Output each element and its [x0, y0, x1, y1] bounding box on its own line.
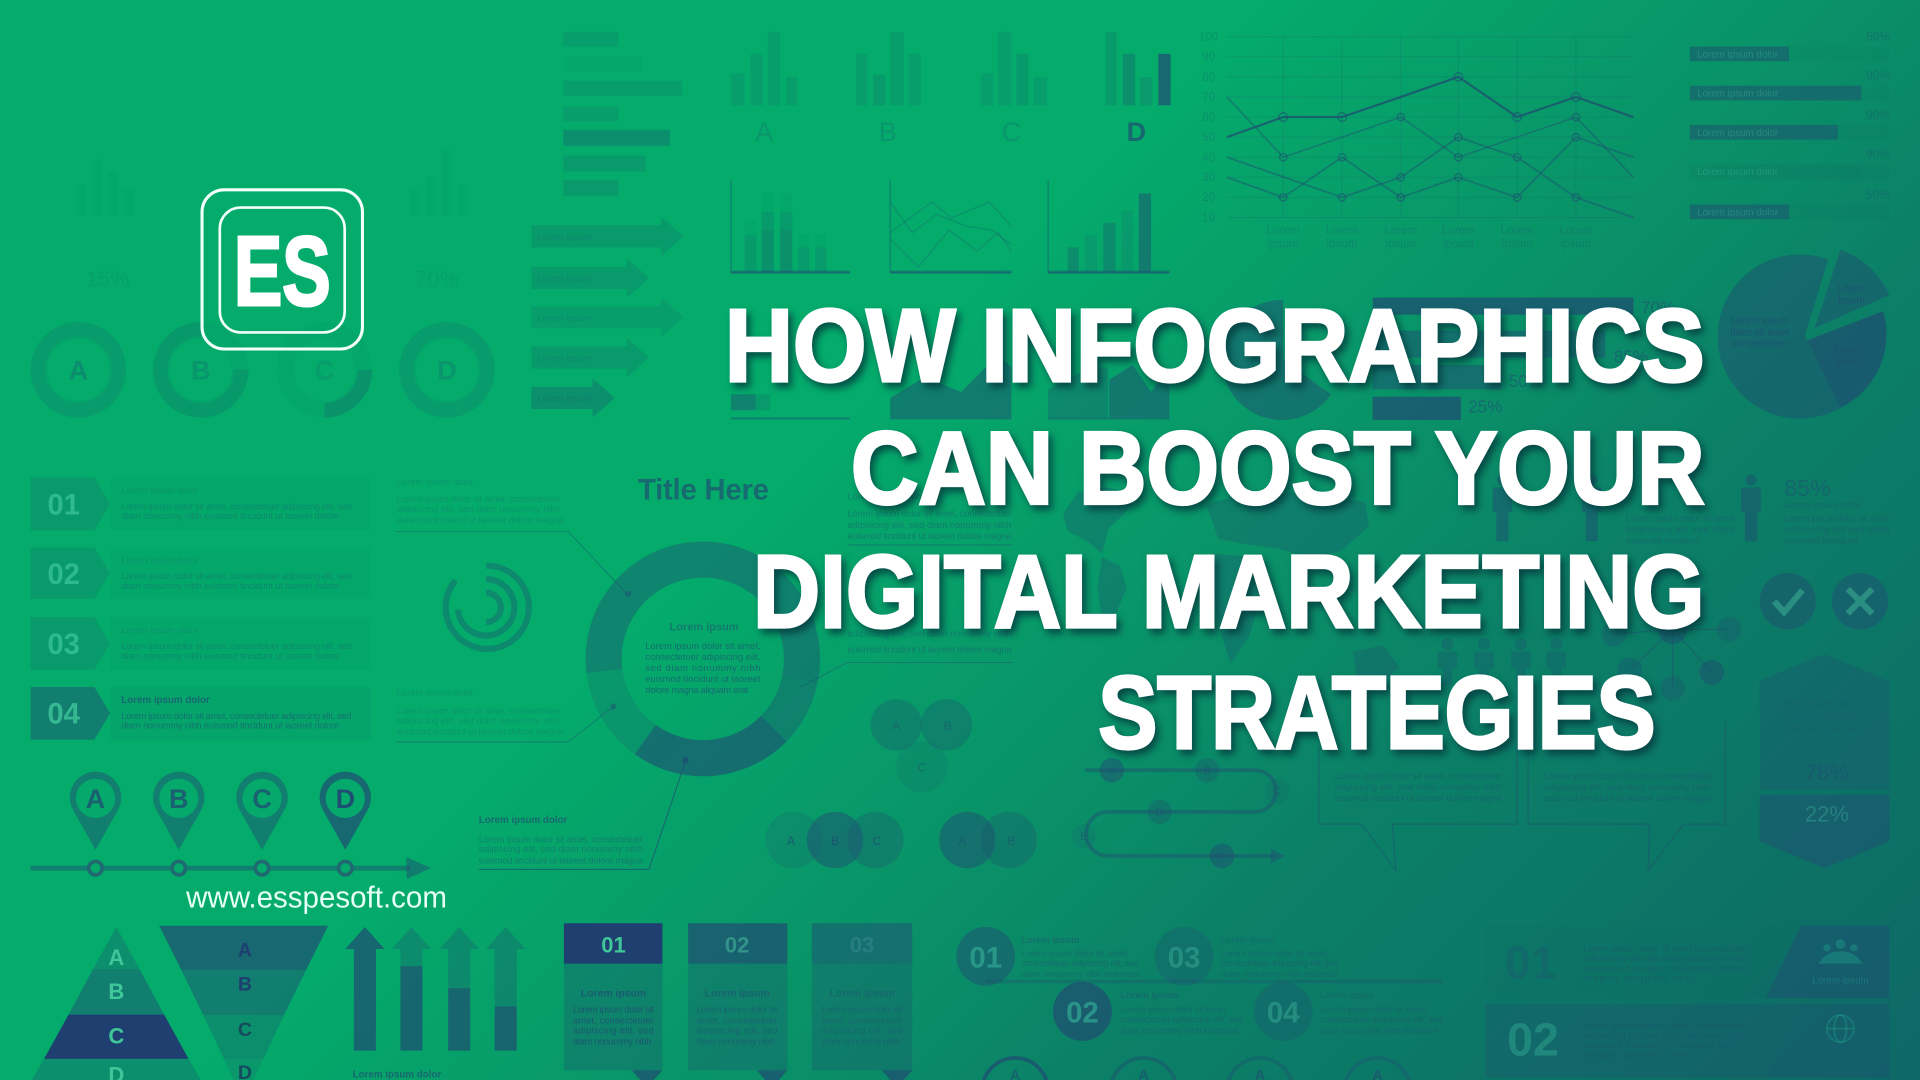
- large exploded pie chart: ipsum: [1838, 296, 1864, 307]
- panel 02 right: [1485, 1004, 1889, 1078]
- row 01: Lorem ipsum dolor sit amet, consectetuer adipiscing elit, sed: [121, 501, 351, 511]
- bar chart group B: [856, 32, 921, 147]
- card 03: [812, 923, 912, 1080]
- icon: globe: [1827, 1015, 1854, 1042]
- panel 01 right: 01: [1505, 936, 1556, 988]
- card 03: amet, consectetuer: [822, 1016, 902, 1026]
- pin A: A: [86, 784, 105, 814]
- card 02: diam nonummy nibh: [697, 1036, 775, 1046]
- x labels: [1267, 224, 1592, 250]
- bar chart group D: [1106, 32, 1171, 147]
- step 02: 02: [1066, 996, 1099, 1029]
- snake timeline: A: [1108, 765, 1116, 777]
- x labels: ipsum: [1327, 237, 1358, 250]
- donut centre text: sed diam nonummy nibh: [645, 663, 760, 673]
- progress bars: 90%: [1866, 148, 1889, 161]
- step 01: Lorem ipsum: [1021, 935, 1080, 945]
- speech bubble left: adipiscing elit, sed diam nonummy nibh: [1335, 782, 1501, 792]
- hexagon stat: 22%: [1805, 802, 1849, 827]
- panel 02 right: 02: [1507, 1014, 1559, 1066]
- speech bubble right: Lorem ipsum dolor sit amet, consectetuer: [1544, 771, 1711, 781]
- small line chart: [890, 180, 1011, 274]
- callouts right of donut: Lorem ipsum dolor: [847, 492, 924, 502]
- venn diagram AB: B: [1007, 834, 1016, 848]
- title line 3: DIGITAL MARKETING: [753, 534, 1704, 649]
- card 02: adipiscing elit, sed: [697, 1025, 778, 1035]
- card 03: Lorem ipsum: [829, 989, 895, 1000]
- large exploded pie chart: Lorem: [1838, 283, 1865, 294]
- pin A: [70, 772, 121, 875]
- series lines: [1227, 77, 1633, 137]
- funnel: B: [238, 974, 252, 996]
- axis values: 10: [1202, 212, 1216, 225]
- row 03: [31, 617, 371, 670]
- gauge B: [160, 329, 241, 410]
- arrow list: Lorem ipsum: [538, 232, 592, 242]
- pin D: [320, 772, 371, 875]
- snake timeline: C: [1273, 786, 1281, 798]
- callout: bottom of donut: euismod tincidunt ut laoreet dolore magna: [479, 855, 644, 865]
- numbered list rows: [31, 478, 371, 740]
- large exploded pie chart: [1718, 250, 1889, 419]
- faint bar chart: 70%: 70%: [415, 267, 459, 292]
- speech bubble right: adipiscing elit, sed diam nonummy nibh: [1544, 782, 1711, 792]
- callouts right of donut: euismod tincidunt ut laoreet dolore magna: [847, 531, 1012, 541]
- row 01: Lorem ipsum dolor: [121, 485, 198, 495]
- axis values: 30: [1202, 171, 1216, 184]
- step 03: Lorem ipsum dolor sit amet,: [1221, 948, 1329, 958]
- venn diagram ABC: B: [831, 834, 839, 848]
- venn diagram three up: A: [892, 719, 901, 733]
- row 02: Lorem ipsum dolor: [121, 555, 198, 565]
- venn diagram ABC: [765, 812, 904, 868]
- panel 01 right: euismod tincidunt ut laoreet dolore: [1583, 963, 1746, 973]
- people and 85% stat: euismod tincidunt: [1784, 536, 1858, 546]
- donut chart: [604, 560, 802, 758]
- panel 01 right: Lorem ipsum: [1812, 975, 1869, 986]
- step 04: 04: [1267, 996, 1300, 1029]
- title here: Title Here: [638, 474, 769, 507]
- callouts right of donut: Lorem ipsum dolor sit amet, consectetuer: [847, 509, 1011, 519]
- donut bottom segment: [645, 729, 774, 758]
- callout: lower left of donut: adipiscing elit, sed diam nonummy nibh: [397, 716, 561, 726]
- x labels: ipsum: [1560, 237, 1591, 250]
- people and 85% stat: Lorem ipsum dolor sit amet: [1784, 514, 1890, 524]
- step 04: Lorem ipsum: [1320, 990, 1374, 1000]
- speech bubble right: euismod tincidunt ut laoreet dolore magna: [1544, 793, 1711, 803]
- callout: bottom of donut: Lorem ipsum dolor sit amet, consectetuer: [479, 834, 643, 844]
- check and cross icons: [1760, 573, 1888, 629]
- callout: upper left of donut: adipiscing elit, sed diam nonummy nibh: [397, 504, 561, 514]
- step 02: Lorem ipsum dolor sit amet,: [1120, 1005, 1228, 1015]
- x labels: ipsum: [1268, 237, 1299, 250]
- large exploded pie chart: Lorem ipsum: [1731, 315, 1788, 326]
- step 01: diam nonummy nibh euismod: [1021, 969, 1139, 979]
- progress bars: 50%: [1866, 188, 1889, 201]
- row 04: Lorem ipsum dolor sit amet, consectetuer adipiscing elit, sed: [121, 711, 351, 721]
- people and 85% stat: Lorem ipsum dolor sit amet: [1626, 514, 1734, 524]
- title line 1: HOW INFOGRAPHICS: [725, 288, 1704, 403]
- pyramid: A: [108, 945, 124, 970]
- donut top segment: [604, 560, 802, 679]
- horizontal bar list: [563, 32, 682, 196]
- progress bars: Lorem ipsum dolor: [1697, 50, 1779, 61]
- people and 85% stat: adipiscing elit sed diam: [1626, 525, 1734, 535]
- step 03: consectetuer adipiscing elit, sed: [1221, 958, 1338, 968]
- donut centre text: Lorem ipsum: [669, 622, 739, 634]
- horizontal percentage bars behind title: [1373, 297, 1675, 420]
- ring gauges A to D: [38, 329, 487, 410]
- progress bars: [1690, 30, 1889, 219]
- progress bars: Lorem ipsum dolor: [1697, 208, 1779, 219]
- donut centre text: Lorem ipsum dolor sit amet,: [645, 641, 760, 651]
- speech bubble left: Lorem ipsum dolor sit amet, consectetuer: [1335, 771, 1501, 781]
- row 04: [31, 687, 371, 740]
- venn diagram three up: [871, 699, 972, 792]
- card 01: Lorem ipsum dolor sit: [573, 1005, 654, 1015]
- row 02: Lorem ipsum dolor sit amet, consectetuer adipiscing elit, sed: [121, 571, 351, 581]
- funnel: [159, 926, 328, 1080]
- icon: people: [1818, 939, 1862, 964]
- step 04: Lorem ipsum dolor sit amet,: [1320, 1005, 1428, 1015]
- snake timeline: [1071, 758, 1289, 868]
- snake timeline: B: [1204, 765, 1211, 777]
- callout: lower left of donut: Lorem ipsum dolor: [397, 688, 474, 698]
- callouts right of donut: euismod tincidunt ut laoreet dolore magna: [847, 645, 1012, 655]
- network diagram: [1602, 615, 1741, 700]
- card 03: 03: [850, 933, 874, 958]
- gauge C: [284, 329, 365, 410]
- donut lower left segment: [604, 671, 645, 740]
- x labels: ipsum: [1443, 237, 1474, 250]
- callout: lower left of donut: [397, 688, 617, 742]
- callout: upper left of donut: euismod tincidunt ut laoreet dolore magna: [397, 515, 564, 525]
- venn diagram AB: [939, 812, 1037, 868]
- faint bar chart: 15%: [76, 159, 133, 292]
- card 02: Lorem ipsum dolor sit: [697, 1005, 778, 1015]
- step 02: [1053, 982, 1243, 1041]
- venn diagram three up: C: [918, 760, 927, 774]
- progress bars: 90%: [1866, 70, 1889, 83]
- card 01: diam nonummy nibh: [573, 1036, 651, 1046]
- faint bar chart: 70%: [410, 149, 468, 292]
- x labels: Lorem: [1384, 224, 1417, 237]
- card 01: Lorem ipsum: [581, 989, 646, 1000]
- world map: [1063, 487, 1400, 681]
- large exploded pie chart: dolor sit amet: [1730, 328, 1789, 339]
- person figures: [1493, 474, 1761, 541]
- progress bars: Lorem ipsum dolor: [1697, 89, 1779, 100]
- people and 85% stat: euismod tincidunt: [1626, 536, 1700, 546]
- bar chart group B: B: [879, 117, 897, 147]
- axis values: 60: [1202, 111, 1216, 124]
- row 03: Lorem ipsum dolor: [121, 625, 198, 635]
- panel 02 right: magna aliquam erat: [1583, 1050, 1694, 1060]
- snake timeline: F: [1219, 851, 1226, 863]
- row 04: Lorem ipsum dolor: [121, 695, 210, 706]
- pie chart behind title: [1222, 300, 1331, 420]
- step 03: [1155, 927, 1338, 986]
- venn diagram ABC: C: [872, 834, 881, 848]
- callout: lower left of donut: Lorem ipsum dolor sit amet, consectetuer: [397, 706, 561, 716]
- horizontal percentage bars behind title: 85%: [1614, 346, 1648, 366]
- panel 01 right: adipiscing elit sed diam nonummy nibh: [1583, 953, 1746, 963]
- bottom badges A: [982, 1058, 1411, 1080]
- people and 85% stat: [1493, 474, 1890, 546]
- row 03: 03: [47, 628, 80, 661]
- pin C: [236, 772, 288, 875]
- axis values: 90: [1202, 50, 1216, 63]
- donut lower right segment: [774, 679, 800, 729]
- axis values: 100: [1199, 30, 1219, 43]
- multi-line chart: [1199, 30, 1633, 250]
- people row icons: [1438, 638, 1566, 686]
- horizontal percentage bars behind title: 70%: [1641, 297, 1675, 317]
- card 03: diam nonummy nibh: [822, 1036, 900, 1046]
- callouts right of donut: adipiscing elit, sed diam nonummy nibh: [847, 629, 1011, 639]
- axis values: 80: [1202, 71, 1216, 84]
- step 03: 03: [1168, 941, 1200, 974]
- pyramid: B: [108, 979, 124, 1004]
- x labels: ipsum: [1385, 237, 1416, 250]
- title line 2: CAN BOOST YOUR: [851, 410, 1704, 525]
- hexagon stat: Lorem ipsum dolor sit: [1780, 699, 1869, 709]
- logo monogram: ES: [234, 216, 331, 326]
- callouts right of donut: adipiscing elit, sed diam nonummy nibh: [847, 520, 1011, 530]
- axis values: 70: [1202, 90, 1216, 103]
- speech bubble left: [1319, 747, 1517, 871]
- row 01: 01: [47, 488, 80, 521]
- step 02: Lorem ipsum: [1120, 990, 1179, 1000]
- bar chart group C: C: [1002, 117, 1021, 147]
- pin B: [153, 772, 204, 875]
- panel 02 right: Lorem ipsum dolor sit amet consectetuer: [1583, 1021, 1746, 1031]
- venn diagram ABC: A: [787, 834, 796, 848]
- panel 01 right: magna aliquam erat: [1583, 973, 1694, 983]
- donut centre text: consectetuer adipiscing elit,: [645, 652, 760, 662]
- pin D: D: [336, 784, 355, 814]
- callout: bottom of donut: Lorem ipsum dolor: [479, 815, 568, 826]
- hexagon stat: amet consectetuer: [1786, 711, 1863, 721]
- step 03: Lorem ipsum: [1221, 935, 1275, 945]
- step 02: consectetuer adipiscing elit, sed: [1120, 1014, 1243, 1024]
- row 02: diam nonummy nibh euismod tincidunt ut laoreet dolore: [121, 581, 339, 591]
- bar chart group A: [731, 32, 797, 147]
- snake timeline: D: [1156, 807, 1164, 819]
- arrow list: Lorem ipsum: [538, 313, 592, 323]
- gauge C: C: [315, 356, 334, 386]
- card 02: Lorem ipsum: [705, 989, 770, 1000]
- callouts right of donut: [801, 492, 1013, 687]
- axis values: 50: [1202, 131, 1216, 144]
- x labels: ipsum: [1502, 237, 1533, 250]
- x labels: Lorem: [1267, 224, 1300, 237]
- gauge B: B: [191, 356, 211, 386]
- donut centre text: [645, 622, 761, 695]
- card 02: [688, 923, 787, 1080]
- funnel: C: [238, 1019, 252, 1041]
- website url: www.esspesoft.com: [185, 880, 447, 914]
- markers: [1279, 73, 1580, 201]
- numbered circle steps: [956, 927, 1442, 1041]
- large exploded pie chart: Lorem: [1835, 345, 1863, 356]
- gauge A: A: [69, 356, 88, 386]
- row 03: diam nonummy nibh euismod tincidunt ut laoreet dolore: [121, 651, 339, 661]
- bar chart group A: A: [755, 117, 773, 147]
- arrow list: [531, 217, 683, 418]
- pyramid: [32, 927, 201, 1080]
- x labels: Lorem: [1501, 224, 1534, 237]
- card 01: adipiscing elit, sed: [573, 1025, 654, 1035]
- people and 85% stat: Lorem ipsum dolor: [1784, 500, 1861, 510]
- small column chart: [1048, 180, 1169, 274]
- panel 01 right: [1485, 926, 1889, 998]
- donut centre text: euismod tincidunt ut laoreet: [645, 674, 761, 684]
- progress bars: Lorem ipsum dolor: [1697, 167, 1779, 178]
- large exploded pie chart: consectetuer: [1732, 339, 1788, 350]
- x labels: Lorem: [1442, 224, 1475, 237]
- progress bars: 90%: [1866, 109, 1889, 122]
- people and 85% stat: 85%: [1784, 475, 1831, 501]
- panel 02 right: adipiscing elit sed diam nonummy nibh: [1583, 1030, 1746, 1040]
- funnel: A: [238, 939, 252, 961]
- panel 01 right: Lorem ipsum dolor sit amet consectetuer: [1583, 943, 1746, 953]
- logo inner frame: [220, 208, 345, 332]
- row 02: 02: [47, 558, 80, 591]
- pin B: B: [169, 784, 189, 814]
- timeline arrow: [31, 857, 431, 879]
- hexagon stat: [1760, 654, 1889, 868]
- donut centre text: dolore magna aliquam erat: [645, 685, 749, 695]
- step 02: diam nonummy nibh euismod: [1120, 1025, 1238, 1035]
- horizontal percentage bars behind title: 50%: [1509, 371, 1543, 391]
- card 03: Lorem ipsum dolor sit: [822, 1005, 903, 1015]
- card 01: [564, 923, 662, 1080]
- callout: upper left of donut: Lorem ipsum dolor sit amet, consectetuer: [397, 494, 561, 504]
- grid: [1227, 37, 1633, 218]
- progress bars: Lorem ipsum dolor: [1697, 128, 1779, 139]
- step 01: 01: [969, 941, 1002, 974]
- arrow list: Lorem ipsum: [538, 353, 592, 363]
- row 01: diam nonummy nibh euismod tincidunt ut laoreet dolore: [121, 511, 339, 521]
- callout: bottom of donut: [479, 757, 689, 869]
- title: [725, 288, 1704, 770]
- venn diagram AB: A: [958, 834, 967, 848]
- callout: lower left of donut: euismod tincidunt ut laoreet dolore magna: [397, 727, 564, 737]
- row 04: 04: [47, 698, 81, 731]
- venn diagram three up: B: [944, 719, 952, 733]
- up arrows chart: [345, 927, 525, 1080]
- row 02: [31, 547, 371, 599]
- callout: upper left of donut: Lorem ipsum dolor: [397, 477, 474, 487]
- card 02: 02: [725, 933, 749, 958]
- map pins timeline: [31, 772, 431, 879]
- pyramid: C: [108, 1023, 124, 1048]
- speech bubble left: euismod tincidunt ut laoreet dolore magna: [1335, 793, 1502, 803]
- row 01: [31, 478, 371, 530]
- snake timeline: E: [1080, 831, 1087, 843]
- callout: upper left of donut: [397, 477, 631, 597]
- stacked column chart: [731, 180, 850, 274]
- card 03: adipiscing elit, sed: [822, 1025, 902, 1035]
- row 03: Lorem ipsum dolor sit amet, consectetuer adipiscing elit, sed: [121, 641, 351, 651]
- bar chart group D: D: [1127, 117, 1146, 147]
- axis values: 40: [1202, 152, 1216, 165]
- axis values: 20: [1202, 191, 1216, 204]
- step 03: diam nonummy nibh euismod: [1221, 969, 1338, 979]
- card 02: amet, consectetuer: [697, 1016, 778, 1026]
- small chart row behind title: [731, 355, 1169, 419]
- title line 4: STRATEGIES: [1098, 655, 1656, 770]
- people and 85% stat: adipiscing elit sed diam: [1784, 525, 1890, 535]
- card 01: amet, consectetuer: [573, 1016, 654, 1026]
- step 01: Lorem ipsum dolor sit amet,: [1021, 948, 1129, 958]
- gauge D: [407, 329, 487, 410]
- card 01: 01: [601, 933, 626, 958]
- logo outer frame: [202, 190, 362, 349]
- progress bars: 50%: [1866, 30, 1889, 43]
- step 04: consectetuer adipiscing elit, sed: [1320, 1014, 1442, 1024]
- logo: [202, 190, 362, 349]
- axis values: [1199, 30, 1219, 225]
- hexagon stat: adipiscing elit sed: [1788, 723, 1861, 733]
- x labels: Lorem: [1559, 224, 1592, 237]
- concentric arcs icon: [446, 566, 529, 649]
- step 04: [1254, 982, 1442, 1041]
- arrow list: Lorem ipsum: [538, 394, 592, 404]
- step 04: diam nonummy nibh euismod: [1320, 1025, 1438, 1035]
- speech bubble right: [1528, 722, 1725, 871]
- row 04: diam nonummy nibh euismod tincidunt ut laoreet dolore: [121, 721, 339, 731]
- pin C: C: [252, 784, 272, 814]
- gauge D: D: [437, 356, 457, 386]
- step 01: consectetuer adipiscing elit, sed: [1021, 958, 1139, 968]
- arrow list: Lorem ipsum: [538, 274, 592, 284]
- panel 02 right: euismod tincidunt ut laoreet dolore: [1583, 1040, 1746, 1050]
- faint bar chart: 15%: 15%: [86, 267, 130, 292]
- step 01: [956, 927, 1139, 986]
- horizontal percentage bars behind title: 25%: [1468, 397, 1502, 417]
- callout: bottom of donut: adipiscing elit, sed diam nonummy nibh: [479, 844, 643, 854]
- gauge A: [38, 329, 119, 410]
- x labels: Lorem: [1326, 224, 1359, 237]
- hexagon stat: 78%: [1805, 760, 1849, 785]
- bar chart group C: [981, 32, 1047, 147]
- large exploded pie chart: ipsum: [1836, 357, 1862, 368]
